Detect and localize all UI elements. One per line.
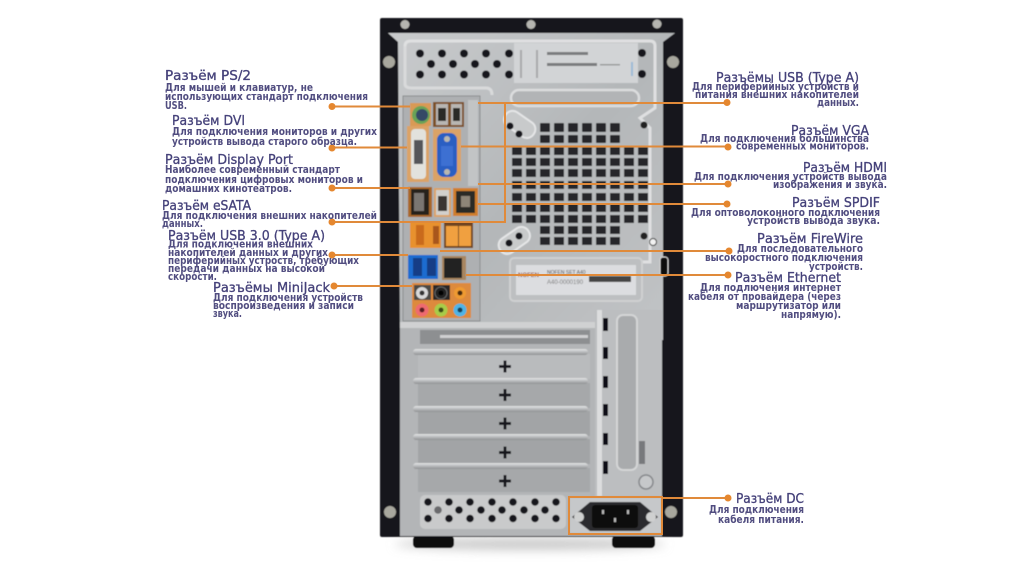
serial number sticker: NOFEN SET A40 <box>547 270 586 276</box>
serial number sticker: NOFEN <box>518 273 539 279</box>
orange leader lines <box>332 103 729 534</box>
leader: SPDIF <box>478 203 727 205</box>
label: DVI: Для подключения мониторов и других <box>172 126 377 138</box>
label: MiniJack: Для подключения устройств <box>213 292 363 304</box>
label: FireWire: устройств. <box>809 261 863 273</box>
expansion slot covers <box>400 322 595 492</box>
label: HDMI <box>694 161 887 191</box>
label: Ethernet: Для подлючения интернет <box>700 282 842 294</box>
label: VGA: современных мониторов. <box>736 140 869 152</box>
leader: eSATA <box>332 221 410 223</box>
connector labels <box>162 69 887 526</box>
eSATA, FireWire and USB orange-highlighted row <box>410 222 473 248</box>
leader: Ethernet <box>466 274 728 276</box>
leader: USB 3.0 <box>332 254 408 256</box>
label: DC <box>709 492 804 526</box>
label: PS/2: Для мышей и клавиатур, не <box>165 82 313 94</box>
label: Ethernet: кабеля от провайдера (через <box>688 291 841 303</box>
label: MiniJack <box>213 281 363 320</box>
label: USB Type A: данных. <box>817 97 859 109</box>
lower silver panel <box>400 322 662 536</box>
label: HDMI: изображения и звука. <box>773 179 887 191</box>
PS/2 port <box>410 103 431 126</box>
label: Display Port: домашних кинотеатров. <box>165 183 292 195</box>
I/O plate <box>403 96 480 321</box>
label: PS/2: USB. <box>165 100 187 112</box>
lower vent holes <box>420 495 566 529</box>
label: Ethernet <box>688 271 842 321</box>
label: USB Type A <box>692 71 859 109</box>
label: DVI: устройств вывода старого образца. <box>172 136 357 148</box>
power socket highlight frame <box>569 497 662 534</box>
leader: PS/2 <box>332 106 410 108</box>
label: USB 3.0: Для подключения внешних <box>168 238 313 250</box>
label: PS/2 <box>165 69 368 112</box>
label: Ethernet: маршрутизатор или <box>736 300 841 312</box>
label: FireWire: Для последовательного <box>737 243 863 255</box>
HDMI port <box>434 188 451 217</box>
label: FireWire: Разъём FireWire <box>757 232 863 247</box>
label: USB 3.0: скорости. <box>168 271 217 283</box>
stamped mounting bosses <box>495 108 656 257</box>
label: DVI: Разъём DVI <box>172 114 245 129</box>
label: MiniJack: звука. <box>213 308 242 320</box>
label: DC: Разъём DC <box>736 492 804 507</box>
label: USB 3.0 <box>168 229 359 283</box>
upper silver panel <box>388 33 675 340</box>
fan grille <box>512 123 648 245</box>
barcode sticker <box>514 43 638 83</box>
top vent recess <box>405 41 655 262</box>
Ethernet port <box>442 256 466 280</box>
label: DC: Для подключения <box>709 504 804 516</box>
label: SPDIF: Разъём SPDIF <box>792 196 880 211</box>
label: eSATA: Разъём eSATA <box>162 199 251 214</box>
side latch <box>660 257 668 276</box>
DVI port <box>407 126 429 182</box>
label: PS/2: использующих стандарт подключения <box>165 91 368 103</box>
leader: DisplayPort <box>332 187 410 189</box>
label: eSATA: данных. <box>162 218 203 230</box>
label: HDMI: Для подключения устройств вывода <box>694 171 887 183</box>
power socket <box>570 498 661 533</box>
leader: MiniJack <box>334 285 412 287</box>
label: Display Port: подключения цифровых мониторов и <box>165 174 363 186</box>
label: Ethernet: напрямую). <box>781 309 841 321</box>
label: USB 3.0: Разъём USB 3.0 (Type A) <box>168 229 325 244</box>
label: HDMI: Разъём HDMI <box>803 161 887 176</box>
label: SPDIF <box>691 196 880 227</box>
label: MiniJack: воспроизведения и записи <box>213 300 354 312</box>
label: MiniJack: Разъёмы MiniJack <box>213 281 330 296</box>
label: USB Type A: Разъёмы USB (Type A) <box>716 71 859 86</box>
label: SPDIF: устройств вывода звука. <box>747 215 880 227</box>
label: Display Port: Наиболее современный стандарт <box>165 164 341 176</box>
label: FireWire <box>705 232 863 273</box>
USB Type A ports <box>433 102 464 127</box>
label: Ethernet: Разъём Ethernet <box>735 271 841 286</box>
leader: FireWire <box>440 250 729 252</box>
slot plus marks <box>499 360 511 487</box>
label: DC: кабеля питания. <box>718 514 804 526</box>
right side vertical bracket <box>595 310 662 496</box>
leader: DC <box>662 497 728 499</box>
label: USB 3.0: накопителей данных и других <box>168 247 328 259</box>
oblong stamped recess <box>511 90 639 106</box>
leader end dots <box>328 99 732 502</box>
label: USB Type A: питания внешних накопителей <box>695 89 859 101</box>
label: PS/2: Разъём PS/2 <box>165 69 251 84</box>
black chassis frame <box>380 18 683 537</box>
label: USB 3.0: передачи данных на высокой <box>168 263 325 275</box>
label: VGA <box>700 124 869 152</box>
serial number sticker <box>510 258 642 301</box>
computer case rear <box>380 18 683 550</box>
DisplayPort port <box>408 187 432 217</box>
SPDIF port <box>453 188 478 216</box>
label: FireWire: высокоростного подключения <box>705 252 863 264</box>
top vent holes <box>416 49 646 78</box>
label: eSATA <box>162 199 377 230</box>
label: SPDIF: Для оптоволоконного подключения <box>691 207 880 219</box>
USB 3.0 ports <box>408 255 438 279</box>
chassis screws <box>383 20 679 518</box>
case feet <box>395 536 665 550</box>
label: VGA: Разъём VGA <box>791 124 869 139</box>
VGA port <box>433 129 461 181</box>
MiniJack audio ports <box>412 283 471 318</box>
leader: DVI <box>332 146 407 148</box>
leader: USB branch <box>408 103 726 222</box>
label: eSATA: Для подключения внешних накопителей <box>162 210 377 222</box>
label: USB Type A: Для периферийных устройств и <box>692 81 859 93</box>
label: USB 3.0: периферийных устроств, требующих <box>168 255 359 267</box>
serial number sticker: A40-0000190 <box>547 280 584 286</box>
leader: VGA <box>461 146 728 148</box>
leader: HDMI <box>478 183 728 185</box>
label: Display Port <box>165 153 363 195</box>
label: DVI <box>172 114 377 148</box>
label: Display Port: Разъём Display Port <box>165 153 293 168</box>
label: VGA: Для подключения большинства <box>700 133 869 145</box>
